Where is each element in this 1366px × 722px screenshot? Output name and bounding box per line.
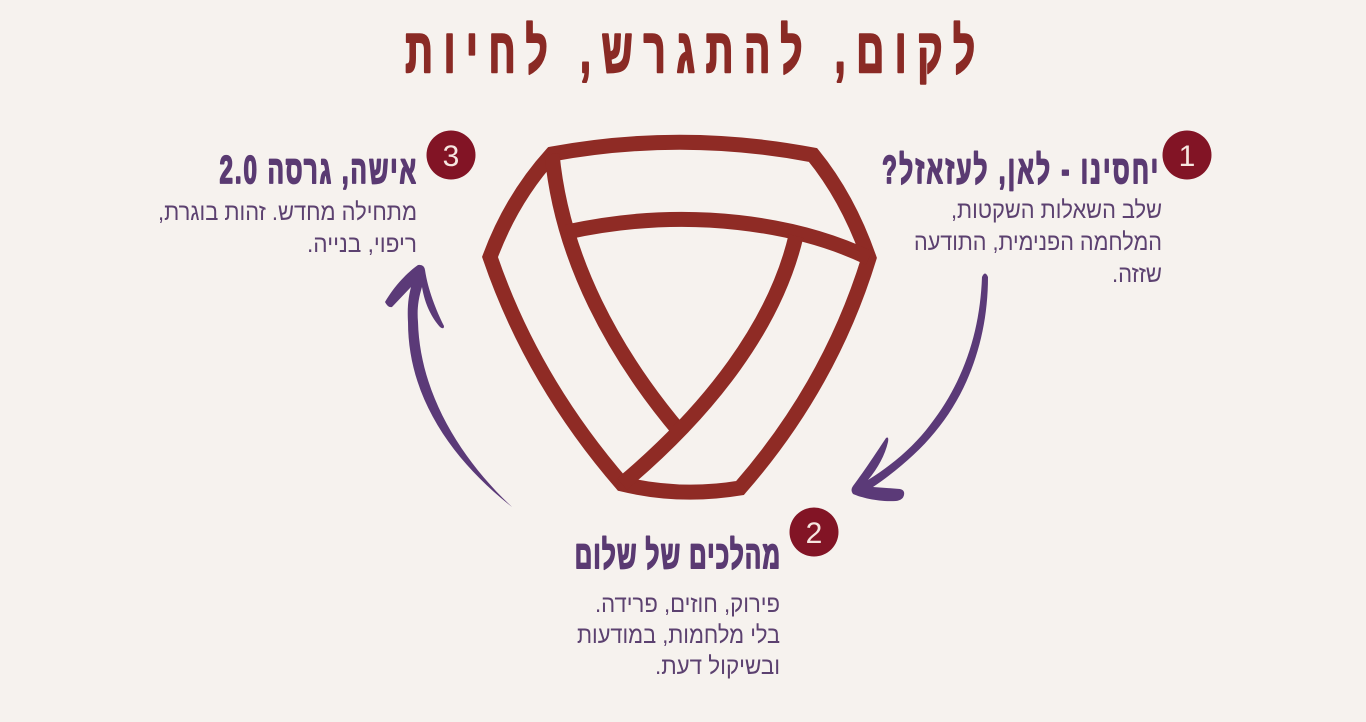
text block: step 1 description <box>914 197 1162 288</box>
badge: number 3 <box>426 130 476 180</box>
badge: number 2: 2 <box>806 517 822 550</box>
title: לקום, להתגרש, לחיות <box>405 16 975 85</box>
text block: step 1 description: שלב השאלות השקטות, <box>951 197 1162 224</box>
arrow: step 2 to step 3 <box>385 265 512 507</box>
panel: step 1 <box>882 130 1212 288</box>
text block: step 1 description: המלחמה הפנימית, התודעה <box>914 229 1162 256</box>
arrow: step 1 to step 2 <box>852 274 988 501</box>
panel: step 2 <box>575 508 838 680</box>
panel: step 3 <box>158 130 476 258</box>
text block: step 3 description <box>158 199 417 258</box>
badge: number 2 <box>790 508 838 556</box>
text block: step 3 description: ריפוי, בנייה. <box>307 231 417 258</box>
badge: number 1: 1 <box>1179 140 1195 173</box>
text block: step 2 description: ובשיקול דעת. <box>655 653 780 680</box>
badge: number 3: 3 <box>443 140 459 173</box>
text block: step 1 description: שזזה. <box>1112 261 1162 288</box>
badge: number 1 <box>1162 130 1212 180</box>
text block: step 2 description: בלי מלחמות, במודעות <box>577 622 780 649</box>
heading: step 2: מהלכים של שלום <box>575 533 780 576</box>
heading: step 3: אישה, גרסה 2.0 <box>219 148 416 191</box>
text block: step 2 description: פירוק, חוזים, פרידה. <box>595 591 780 618</box>
heading: step 1: יחסינו - לאן, לעזאזל? <box>882 148 1158 191</box>
text block: step 2 description <box>577 591 780 680</box>
central icon: woven triangular knot <box>490 142 869 492</box>
text block: step 3 description: מתחילה מחדש. זהות בוגרת, <box>158 199 417 226</box>
